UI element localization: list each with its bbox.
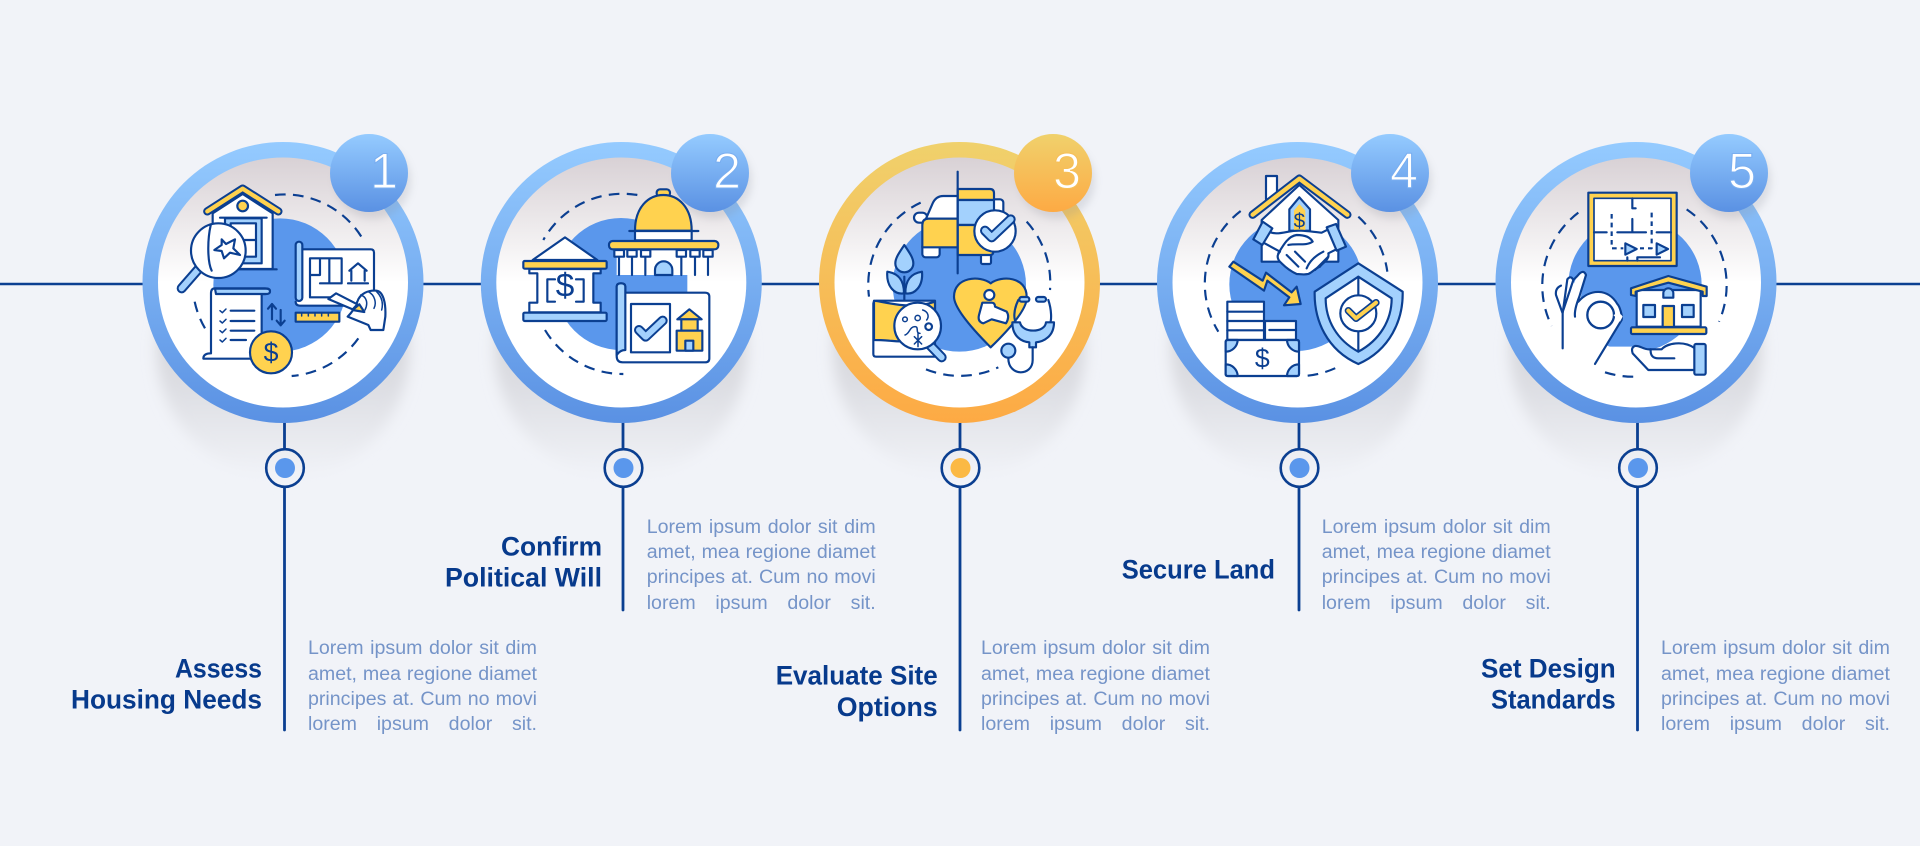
body text 3: lorem ipsum dolor sit.: [981, 713, 1210, 735]
shadow 4: [1171, 226, 1423, 478]
number badge 3: [1014, 134, 1092, 212]
body text 4: Lorem ipsum dolor sit dim: [1322, 516, 1551, 538]
body text 1: Lorem ipsum dolor sit dim: [308, 637, 537, 659]
step 3: [776, 134, 1100, 730]
body text 3: principes at. Cum no movi: [981, 688, 1210, 710]
stem line 2: [622, 420, 624, 610]
shadow 5: [1510, 226, 1762, 478]
heading 1: Assess: [175, 653, 262, 683]
step 4: [1122, 134, 1438, 610]
body text 2: Lorem ipsum dolor sit dim: [647, 516, 876, 538]
stem line 3: [959, 420, 961, 730]
body text 5: amet, mea regione diamet: [1661, 663, 1890, 685]
heading 1: Housing Needs: [71, 684, 262, 714]
number badge 2: 2: [713, 143, 741, 199]
badge shadow 5: [1695, 143, 1771, 219]
inner disc 2: [496, 158, 746, 408]
number badge 2: [671, 134, 749, 212]
heading 1: [71, 653, 262, 714]
stem line 4: [1298, 420, 1300, 610]
horizontal timeline connector: [0, 283, 1920, 285]
shadow 2: [495, 226, 747, 478]
icon: political will: $: [556, 268, 574, 305]
body text 2: principes at. Cum no movi: [647, 566, 876, 588]
badge shadow 2: [676, 143, 752, 219]
body text 3: [981, 637, 1210, 735]
icon: design standards: [1542, 193, 1727, 377]
inner disc 3: [834, 158, 1084, 408]
heading 3: Evaluate Site: [776, 660, 938, 690]
step 1: [71, 134, 424, 730]
timeline node 3: [942, 449, 979, 487]
number badge 5: 5: [1728, 143, 1756, 199]
stem line 1: [283, 420, 286, 730]
timeline node 5: [1619, 449, 1657, 487]
outer ring 1: [142, 142, 424, 423]
icon: political will: [523, 189, 718, 374]
outer ring 5: [1496, 142, 1776, 423]
icon: secure land: $: [1255, 343, 1270, 373]
body text 1: principes at. Cum no movi: [308, 688, 537, 710]
heading 2: Political Will: [445, 563, 602, 593]
icon: site options: [868, 172, 1054, 376]
badge shadow 1: [335, 143, 411, 219]
icon: secure land: $: [1294, 209, 1306, 232]
inner disc 1: [158, 158, 408, 408]
body text 2: lorem ipsum dolor sit.: [647, 592, 876, 614]
heading 5: Standards: [1491, 684, 1616, 714]
badge shadow 3: [1019, 143, 1095, 219]
body text 3: amet, mea regione diamet: [981, 663, 1210, 685]
number badge 1: 1: [370, 143, 398, 199]
number badge 5: [1690, 134, 1768, 212]
body text 1: amet, mea regione diamet: [308, 663, 537, 685]
body text 4: lorem ipsum dolor sit.: [1322, 592, 1551, 614]
timeline node 1: [266, 449, 304, 487]
body text 4: principes at. Cum no movi: [1322, 566, 1551, 588]
number badge 4: 4: [1390, 143, 1418, 199]
icon: housing needs: [182, 189, 385, 376]
body text 5: principes at. Cum no movi: [1661, 688, 1890, 710]
number badge 1: [330, 134, 408, 212]
number badge 3: 3: [1053, 143, 1081, 199]
heading 4: Secure Land: [1122, 554, 1275, 584]
icon: secure land: [1205, 176, 1403, 376]
body text 5: Lorem ipsum dolor sit dim: [1661, 637, 1890, 659]
body text 2: [647, 516, 876, 614]
icon: housing needs: $: [264, 338, 279, 368]
outer ring 3: [819, 142, 1100, 423]
body text 5: [1661, 637, 1890, 735]
timeline node 4: [1281, 449, 1318, 487]
stem line 5: [1636, 420, 1639, 730]
shadow 3: [833, 226, 1085, 478]
outer ring 4: [1157, 142, 1438, 423]
heading 3: Options: [837, 692, 938, 722]
inner disc 5: [1511, 158, 1761, 408]
step 5: [1481, 134, 1776, 730]
body text 4: amet, mea regione diamet: [1322, 541, 1551, 563]
heading 2: [445, 532, 602, 593]
badge shadow 4: [1356, 143, 1432, 219]
body text 4: [1322, 516, 1551, 614]
body text 1: [308, 637, 537, 735]
number badge 4: [1351, 134, 1429, 212]
body text 1: lorem ipsum dolor sit.: [308, 713, 537, 735]
body text 5: lorem ipsum dolor sit.: [1661, 713, 1890, 735]
timeline node 2: [605, 449, 642, 487]
outer ring 2: [481, 142, 762, 423]
heading 2: Confirm: [501, 532, 602, 562]
body text 3: Lorem ipsum dolor sit dim: [981, 637, 1210, 659]
step 2: [445, 134, 762, 610]
shadow 1: [157, 226, 409, 478]
heading 5: [1481, 653, 1616, 714]
heading 5: Set Design: [1481, 653, 1616, 683]
body text 2: amet, mea regione diamet: [647, 541, 876, 563]
heading 3: [776, 660, 938, 722]
inner disc 4: [1172, 158, 1422, 408]
